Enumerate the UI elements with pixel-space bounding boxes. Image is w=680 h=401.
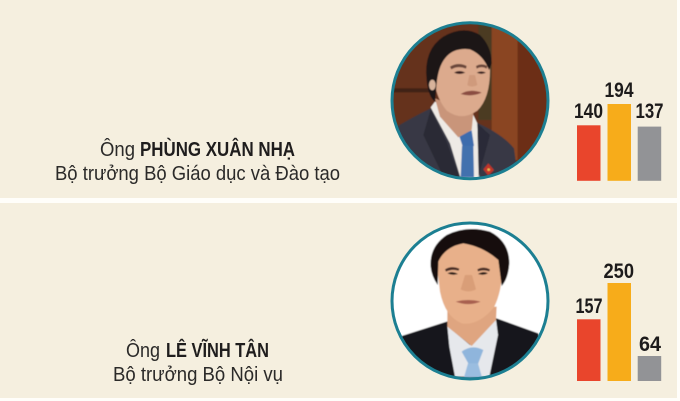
portrait: Phùng Xuân Nhạ	[390, 20, 550, 180]
bar chart: 140, 194, 137	[574, 79, 664, 181]
bar chart: 157, 250, 64	[576, 260, 661, 381]
name: Phùng Xuân Nhạ	[55, 137, 340, 185]
name: Lê Vĩnh Tân: Ông	[126, 339, 160, 362]
bar chart: 140, 194, 137: 194	[604, 79, 634, 102]
bar chart: 140, 194, 137: 137	[636, 100, 664, 123]
name: Phùng Xuân Nhạ: PHÙNG XUÂN NHẠ	[140, 137, 295, 161]
bar chart: 157, 250, 64: 250	[604, 260, 634, 283]
bar chart: 157, 250, 64: 157	[576, 295, 602, 318]
bar chart: 157, 250, 64: 64	[639, 333, 661, 356]
portrait: Lê Vĩnh Tân	[390, 220, 550, 380]
panel: Lê Vĩnh Tân	[0, 203, 677, 398]
name: Lê Vĩnh Tân: LÊ VĨNH TÂN	[166, 338, 269, 362]
name: Phùng Xuân Nhạ: Bộ trưởng Bộ Giáo dục và Đào tạo	[55, 163, 340, 185]
name: Lê Vĩnh Tân	[113, 338, 283, 386]
name: Phùng Xuân Nhạ: Ông	[100, 138, 135, 161]
bar chart: 140, 194, 137: 140	[574, 100, 603, 123]
panel: Phùng Xuân Nhạ	[0, 0, 677, 198]
name: Lê Vĩnh Tân: Bộ trưởng Bộ Nội vụ	[113, 364, 283, 386]
